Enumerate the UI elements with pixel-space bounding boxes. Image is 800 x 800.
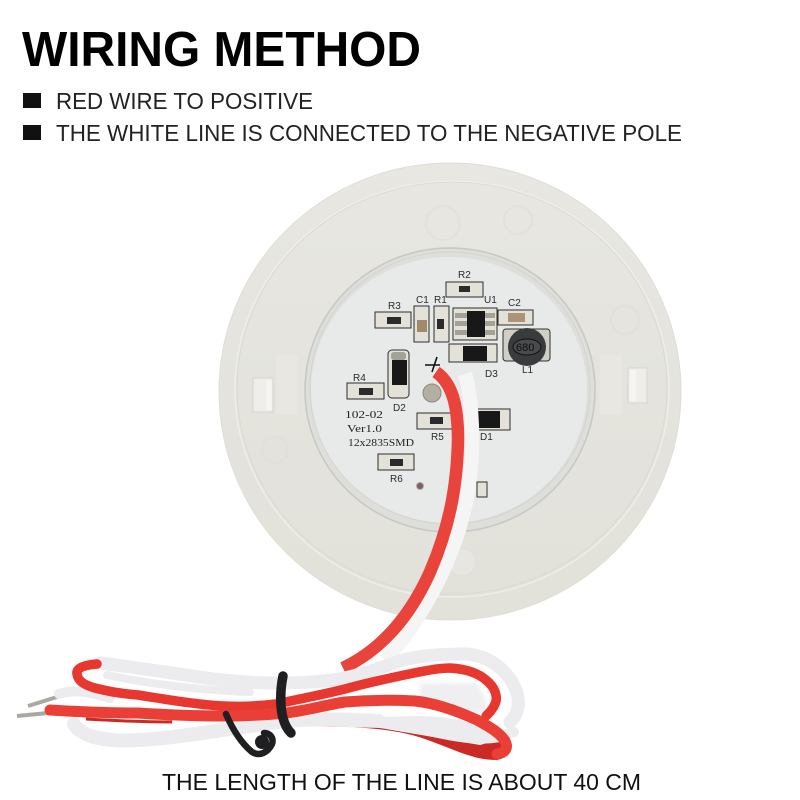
L1 inductor — [503, 328, 550, 376]
C2 — [498, 298, 533, 325]
D3 — [449, 344, 498, 380]
D2: D2 — [393, 403, 406, 414]
L1 inductor: L1 — [522, 365, 534, 376]
wire: white lead — [385, 374, 472, 660]
caption: THE LENGTH OF THE LINE IS ABOUT 40 CM — [162, 769, 641, 795]
dark red back strand — [312, 726, 508, 760]
bullet: white wire: THE WHITE LINE IS CONNECTED TO THE NEGATIVE POLE — [56, 120, 682, 146]
silkscreen text: 12x2835SMD — [348, 438, 414, 449]
coiled wire bundle — [17, 654, 519, 760]
C2: C2 — [508, 298, 521, 309]
black cable tie — [226, 676, 291, 754]
R1: R1 — [434, 295, 447, 306]
R2 — [446, 270, 483, 297]
R2: R2 — [458, 270, 471, 281]
test pad — [416, 482, 424, 490]
D1 — [477, 409, 510, 443]
R4 — [347, 373, 384, 399]
wire: red lead — [343, 372, 458, 668]
lower red strand — [50, 700, 506, 754]
PCB board — [305, 248, 595, 532]
U1 — [453, 295, 497, 340]
bottom pad — [477, 482, 487, 497]
product: round lamp — [219, 163, 681, 620]
solder joint and plus sign — [423, 357, 441, 402]
lower white strand — [74, 719, 379, 740]
R3 — [375, 301, 411, 328]
C1: C1 — [416, 295, 429, 306]
D2 — [388, 350, 409, 414]
L1 inductor: 680 — [516, 342, 534, 354]
dark red left strand — [86, 719, 172, 722]
silkscreen text: 102-02 — [345, 409, 383, 421]
title: WIRING METHOD — [22, 23, 421, 77]
R5 — [417, 413, 453, 443]
U1: U1 — [484, 295, 497, 306]
lamp outer shell — [219, 163, 681, 620]
R6 — [378, 454, 414, 485]
silkscreen text: Ver1.0 — [347, 423, 383, 435]
upper white strand — [100, 654, 519, 722]
light fill inside right loop — [420, 683, 490, 712]
inner white strand — [107, 675, 250, 692]
PCB components — [345, 270, 550, 497]
wire tips — [17, 697, 57, 716]
R1 — [434, 295, 449, 342]
bullet: red wire: RED WIRE TO POSITIVE — [56, 88, 313, 114]
silkscreen text — [345, 409, 414, 449]
R3: R3 — [388, 301, 401, 312]
R6: R6 — [390, 474, 403, 485]
D1: D1 — [480, 432, 493, 443]
C1 — [414, 295, 429, 342]
lower white band right — [370, 716, 500, 744]
upper red strand — [77, 664, 496, 716]
R4: R4 — [353, 373, 366, 384]
R5: R5 — [431, 432, 444, 443]
bullet list — [23, 88, 682, 146]
D3: D3 — [485, 369, 498, 380]
right white tip — [498, 732, 514, 736]
tip white strand — [59, 691, 110, 698]
